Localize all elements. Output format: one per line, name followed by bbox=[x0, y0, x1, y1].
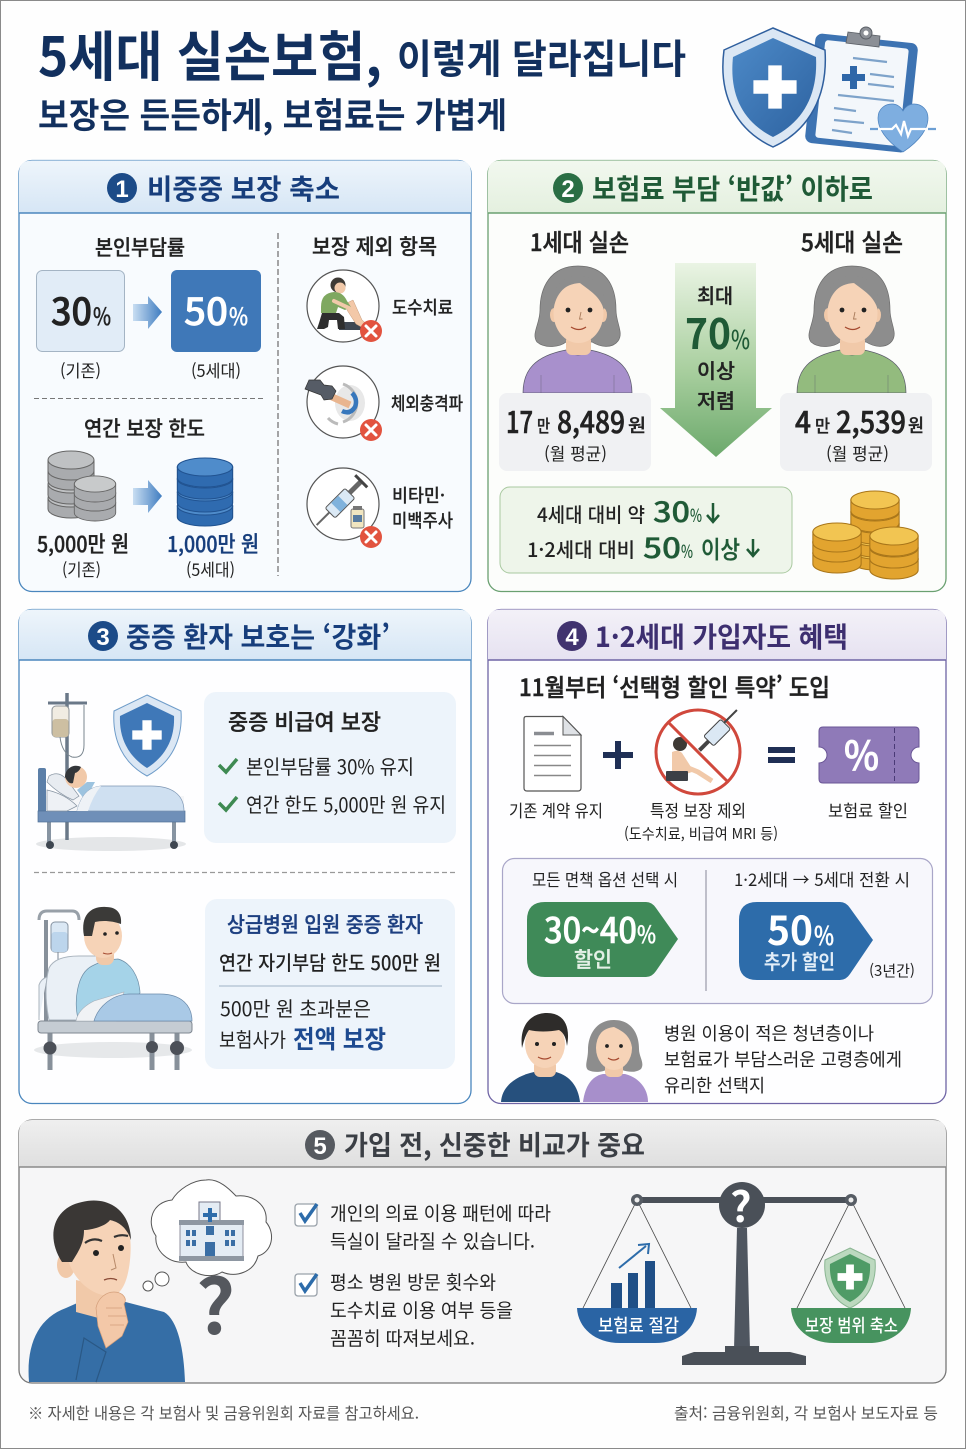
box: 중증 비급여 보장: 본인부담률 30% 유지 bbox=[246, 751, 414, 780]
panel 3: 중증 환자 보호는 강화 bbox=[19, 610, 471, 1104]
checklist item 1 bbox=[295, 1199, 551, 1254]
label: 기존: (기존) bbox=[60, 357, 101, 382]
text: 체외충격파: 체외충격파 bbox=[391, 390, 463, 416]
pan: 보험료 절감 bbox=[577, 1308, 697, 1343]
tag: 50% 추가 할인: 50 bbox=[767, 899, 813, 957]
text: 1세대 실손: 1세대 실손 bbox=[530, 223, 629, 258]
box: 중증 비급여 보장: 연간 한도 5,000만 원 유지 bbox=[246, 789, 446, 818]
box: 50% bbox=[171, 270, 261, 352]
text: 도수치료: 도수치료 bbox=[392, 294, 453, 320]
box: 중증 비급여 보장 bbox=[204, 692, 456, 843]
heading: panel 2: 보험료 부담 ‘반값’ 이하로 bbox=[592, 168, 873, 208]
label: 5세대: (5세대) bbox=[186, 556, 235, 581]
box: 30%: % bbox=[93, 297, 111, 332]
heading: panel 4: 1·2세대 가입자도 혜택 bbox=[595, 616, 848, 656]
label: 특정 보장 제외: 특정 보장 제외 bbox=[650, 797, 746, 822]
icon: shield, clipboard and heart bbox=[723, 27, 936, 153]
heading: panel 3: 3 bbox=[96, 624, 110, 651]
amount: 5,000만 원: 5,000만 원 bbox=[37, 527, 129, 559]
arrow: 최대 70% 이상 저렴: 70 bbox=[685, 301, 731, 362]
pan: 보장 범위 축소 bbox=[791, 1308, 911, 1343]
text: 유리한 선택지: 유리한 선택지 bbox=[664, 1072, 765, 1098]
icon: discount ticket: % bbox=[844, 724, 879, 782]
box: 상급병원 입원 중증 환자: 500만 원 초과분은 bbox=[220, 993, 371, 1022]
checklist item 2: 꼼꼼히 따져보세요. bbox=[330, 1324, 475, 1351]
icon: blue coin stack bbox=[177, 458, 233, 526]
box: discount options bbox=[502, 858, 932, 1004]
icon: plus bbox=[603, 741, 633, 769]
illustration: woman in green bbox=[797, 266, 906, 393]
checklist item 2 bbox=[295, 1268, 513, 1351]
box: 50%: 50 bbox=[184, 282, 228, 336]
callout: 세대 대비 비교: 1·2세대 대비 bbox=[527, 534, 635, 563]
icon: shockwave bbox=[305, 366, 382, 441]
icon: manual therapy bbox=[307, 270, 382, 342]
box: 상급병원 입원 중증 환자: 전액 보장 bbox=[293, 1020, 386, 1056]
tag: 50% 추가 할인: 추가 할인 bbox=[764, 946, 835, 975]
callout: 세대 대비 비교: 이상 bbox=[701, 530, 740, 565]
box: 1세대 premium: 만 bbox=[537, 412, 550, 437]
tag: 30~40% 할인: 30~40 bbox=[544, 903, 637, 954]
illustration: bed with IV drip bbox=[36, 693, 186, 851]
tag: 50% 추가 할인: % bbox=[814, 916, 834, 953]
heading: panel 4: 4 bbox=[565, 624, 579, 651]
icon: gray coin stacks bbox=[48, 451, 116, 521]
checklist item 1: 득실이 달라질 수 있습니다. bbox=[330, 1227, 535, 1254]
icon: rising bars bbox=[611, 1244, 655, 1310]
panel 1: 비중중 보장 축소 bbox=[19, 160, 471, 592]
text: 연간 보장 한도: 연간 보장 한도 bbox=[84, 413, 205, 443]
chart: balance scale: ? bbox=[730, 1174, 752, 1235]
illustration: young man and older woman bbox=[501, 1013, 648, 1102]
box: 1세대 premium: (월 평균) bbox=[544, 440, 607, 465]
icon: question mark: ? bbox=[196, 1246, 235, 1356]
arrow: 최대 70% 이상 저렴: % bbox=[731, 320, 750, 357]
box: 5세대 premium: 2,539 bbox=[836, 398, 906, 442]
heading: panel 1: 비중중 보장 축소 bbox=[147, 168, 340, 208]
box: 5세대 premium: 만 bbox=[815, 412, 830, 437]
icon: document bbox=[524, 716, 581, 791]
box: 1세대 premium: 원 bbox=[628, 412, 646, 438]
callout: 세대 대비 비교: 4세대 대비 약 bbox=[537, 499, 645, 528]
callout: 세대 대비 비교 bbox=[500, 487, 792, 573]
checklist item 2: 평소 병원 방문 횟수와 bbox=[330, 1268, 496, 1295]
text: 유리한 선택지: 병원 이용이 적은 청년층이나 bbox=[664, 1020, 874, 1046]
title: 이렇게 달라집니다 bbox=[397, 27, 686, 85]
box: discount options: 모든 면책 옵션 선택 시 bbox=[532, 866, 678, 891]
icon: syringe and vial bbox=[307, 468, 382, 548]
label: 5세대: (5세대) bbox=[191, 357, 241, 382]
amount: 1,000만 원: 1,000만 원 bbox=[167, 527, 259, 559]
subtitle: 보장은 든든하게, 보험료는 가볍게 bbox=[38, 88, 507, 139]
icon: prohibited treatment bbox=[656, 706, 743, 794]
box: 30% bbox=[36, 270, 124, 352]
checklist item 1: 개인의 의료 이용 패턴에 따라 bbox=[330, 1199, 551, 1226]
text: 비타민·미백주사 bbox=[392, 482, 453, 533]
label: 특정 보장 제외 bbox=[624, 797, 778, 844]
box: 5세대 premium: 원 bbox=[908, 412, 924, 438]
illustration: thinking man bbox=[29, 1201, 185, 1382]
panel 2: 보험료 부담 반값 이하로 bbox=[488, 160, 946, 592]
box: discount options: 1·2세대 → 5세대 전환 시 bbox=[734, 866, 910, 891]
pan: 보험료 절감: 보험료 절감 bbox=[598, 1312, 679, 1338]
chart: balance scale bbox=[577, 1174, 911, 1365]
illustration: woman in purple bbox=[523, 266, 632, 393]
tag: 50% 추가 할인 bbox=[739, 899, 873, 980]
heading: panel 5: 5 bbox=[313, 1133, 327, 1160]
icon: equals bbox=[768, 747, 795, 763]
panel 4: 1·2세대 가입자도 혜택 bbox=[488, 610, 946, 1104]
tag: 30~40% 할인 bbox=[527, 902, 678, 977]
box: 중증 비급여 보장: 중증 비급여 보장 bbox=[228, 705, 381, 737]
icon: thought bubble with hospital bbox=[143, 1180, 272, 1291]
source: 출처: 금융위원회, 각 보험사 보도자료 등 bbox=[674, 1400, 938, 1424]
box: 30%: 30 bbox=[51, 282, 92, 336]
box: 1세대 premium bbox=[499, 393, 651, 471]
panel 5: 가입 전 신중한 비교가 중요 bbox=[19, 1120, 946, 1383]
text: 유리한 선택지 bbox=[664, 1020, 902, 1098]
arrow: 최대 70% 이상 저렴 bbox=[660, 263, 772, 457]
heading: panel 5: 가입 전, 신중한 비교가 중요 bbox=[344, 1124, 645, 1163]
heading: panel 1: 1 bbox=[115, 176, 129, 203]
box: 5세대 premium bbox=[780, 393, 932, 471]
arrow: 최대 70% 이상 저렴: 최대 bbox=[697, 280, 733, 309]
title bbox=[38, 13, 686, 92]
arrow: 최대 70% 이상 저렴: 저렴 bbox=[697, 385, 735, 414]
label: 특정 보장 제외: (도수치료, 비급여 MRI 등) bbox=[624, 823, 778, 844]
text: 유리한 선택지: 보험료가 부담스러운 고령층에게 bbox=[664, 1046, 902, 1072]
text: 본인부담률: 본인부담률 bbox=[95, 232, 185, 262]
heading: panel 2: 2 bbox=[561, 176, 575, 203]
box: 상급병원 입원 중증 환자: 보험사가 bbox=[219, 1024, 286, 1053]
tag: 30~40% 할인: 할인 bbox=[574, 944, 612, 974]
box: 1세대 premium: 8,489 bbox=[557, 398, 625, 442]
text: 5세대 실손: 5세대 실손 bbox=[801, 223, 903, 258]
box: 1세대 premium: 17 bbox=[506, 398, 533, 442]
tag: 30~40% 할인: % bbox=[637, 915, 656, 950]
label: 3년간: (3년간) bbox=[869, 960, 915, 981]
callout: 세대 대비 비교: 30 bbox=[653, 491, 690, 531]
label: 기존 계약 유지: 기존 계약 유지 bbox=[509, 797, 603, 822]
icon: shield bbox=[114, 695, 181, 776]
callout: 세대 대비 비교: % bbox=[690, 502, 702, 528]
label: 기존: (기존) bbox=[62, 556, 101, 581]
box: 상급병원 입원 중증 환자: 연간 자기부담 한도 500만 원 bbox=[219, 947, 441, 976]
box: 상급병원 입원 중증 환자: 상급병원 입원 중증 환자 bbox=[227, 909, 423, 939]
callout: 세대 대비 비교: % bbox=[681, 538, 693, 564]
icon: discount ticket bbox=[819, 724, 919, 783]
arrow: 최대 70% 이상 저렴: 이상 bbox=[697, 355, 735, 384]
box: 상급병원 입원 중증 환자 bbox=[205, 899, 455, 1069]
illustration: patient sitting in bed bbox=[34, 907, 192, 1070]
text: 선택형 할인 특약: 11월부터 ‘선택형 할인 특약’ 도입 bbox=[519, 668, 830, 703]
box: 50%: % bbox=[229, 297, 248, 332]
box: 5세대 premium: (월 평균) bbox=[826, 440, 889, 465]
pan: 보장 범위 축소: 보장 범위 축소 bbox=[805, 1312, 898, 1338]
arrow: 30 to 50 bbox=[133, 296, 162, 329]
text: 보장 제외 항목: 보장 제외 항목 bbox=[312, 231, 437, 261]
icon: green shield bbox=[825, 1248, 875, 1308]
callout: 세대 대비 비교: 50 bbox=[643, 527, 681, 567]
title: 5세대 실손보험, bbox=[38, 13, 382, 92]
checklist item 2: 도수치료 이용 여부 등을 bbox=[330, 1296, 513, 1323]
icon: gold coins bbox=[813, 491, 918, 579]
label: 보험료 할인: 보험료 할인 bbox=[828, 797, 908, 822]
text: 비타민·미백주사: 비타민· bbox=[392, 482, 445, 508]
box: 5세대 premium: 4 bbox=[795, 398, 811, 442]
arrow: limit change bbox=[133, 480, 162, 513]
text: 비타민·미백주사: 미백주사 bbox=[392, 507, 453, 533]
footnote: ※ 자세한 내용은 각 보험사 및 금융위원회 자료를 참고하세요. bbox=[28, 1400, 419, 1424]
heading: panel 3: 중증 환자 보호는 ‘강화’ bbox=[126, 616, 390, 656]
